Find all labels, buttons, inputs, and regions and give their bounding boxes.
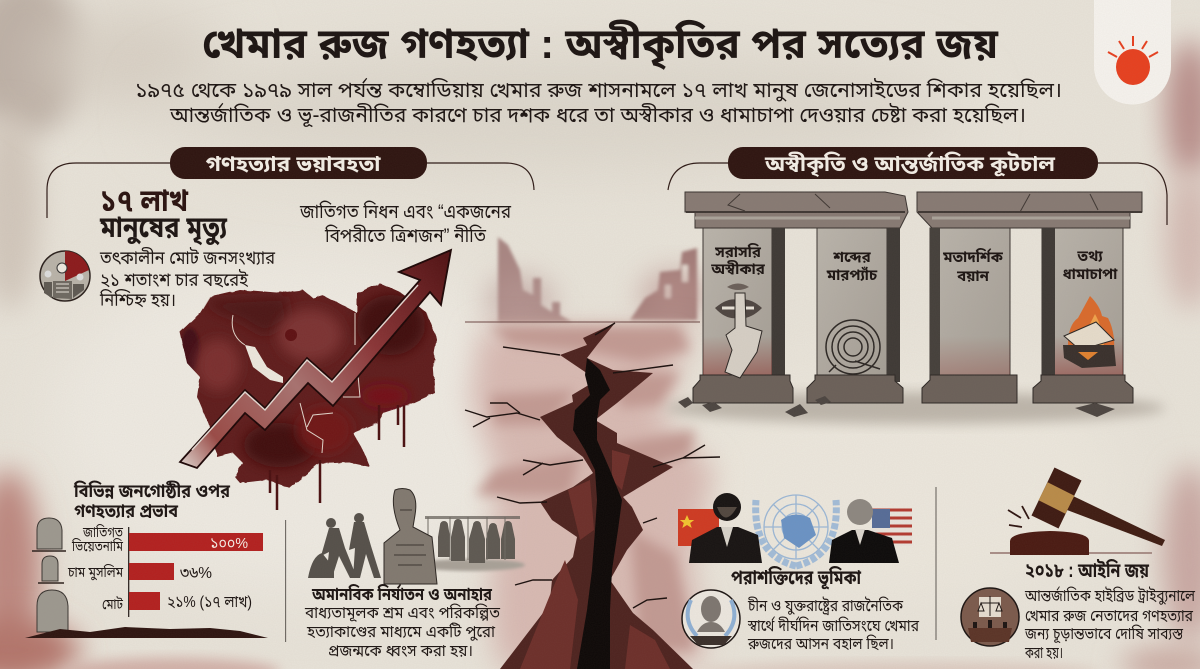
text: 2018 legal victory bbox=[1024, 558, 1195, 662]
bar chart: impact on groups: বিভিন্ন জনগোষ্ঠীর ওপর bbox=[73, 480, 231, 501]
silhouette: Chinese leader bbox=[689, 493, 762, 563]
title: খেমার রুজ গণহত্যা : অস্বীকৃতির পর সত্যের জয় bbox=[202, 19, 999, 71]
panel: left section heading: গণহত্যার ভয়াবহতা bbox=[206, 153, 382, 176]
bar chart: impact on groups: ২১% (১৭ লাখ) bbox=[167, 594, 252, 611]
icon: UN seat bbox=[682, 590, 740, 648]
text: role of superpowers: রুজদের আসন বহাল ছিল। bbox=[747, 634, 894, 653]
text: role of superpowers bbox=[731, 565, 919, 653]
icon: gavel bbox=[990, 474, 1165, 555]
death toll text: নিশ্চিহ্ন হয়। bbox=[99, 290, 176, 310]
bar chart: impact on groups bbox=[25, 480, 268, 638]
pillar: ideological narrative: মতাদর্শিক bbox=[942, 247, 1004, 266]
logo: sun badge bbox=[1094, 0, 1171, 105]
icon: shushing lips and finger bbox=[715, 284, 762, 378]
intro text bbox=[135, 77, 1062, 128]
illustration: superpowers and UN bbox=[678, 493, 912, 566]
panel: right section heading: অস্বীকৃতি ও আন্তর্জাতিক কূটচাল bbox=[764, 152, 1056, 177]
text: role of superpowers: চীন ও যুক্তরাষ্ট্রের রাজনৈতিক bbox=[747, 596, 904, 616]
death toll text: মানুষের মৃত্যু bbox=[99, 212, 228, 246]
rubble bbox=[678, 396, 1115, 417]
intro text: ১৯৭৫ থেকে ১৯৭৯ সাল পর্যন্ত কম্বোডিয়ায় খেমার রুজ শাসনামলে ১৭ লাখ মানুষ জেনোসাইডের শিকার হয়েছিল। bbox=[135, 77, 1062, 102]
bar chart: impact on groups: গণহত্যার প্রভাব bbox=[74, 501, 179, 521]
central fissure with cracked ground and ruins bbox=[465, 237, 720, 669]
pillar: information suppression bbox=[1033, 228, 1133, 403]
bar chart: impact on groups: ৩৬% bbox=[180, 565, 212, 582]
death toll text bbox=[99, 183, 275, 310]
bar chart: impact on groups: জাতিগত bbox=[82, 524, 124, 540]
text: 2018 legal victory: ২০১৮ : আইনি জয় bbox=[1025, 558, 1150, 582]
pillar: direct denial: অস্বীকার bbox=[710, 260, 766, 278]
bar chart: impact on groups: ১০০% bbox=[210, 535, 248, 552]
policy caption: জাতিগত নিধন এবং “একজনের bbox=[299, 200, 512, 223]
black chasm bbox=[573, 358, 622, 669]
pillar: word play: শব্দের bbox=[832, 249, 872, 266]
bar chart: impact on groups: মোট bbox=[102, 596, 123, 612]
pillar: information suppression: তথ্য bbox=[1076, 248, 1103, 265]
text: 2018 legal victory: করা হয়। bbox=[1024, 645, 1063, 662]
pillar: word play bbox=[807, 228, 903, 403]
pillar: information suppression: ধামাচাপা bbox=[1063, 266, 1118, 283]
text: role of superpowers: পরাশক্তিদের ভূমিকা bbox=[731, 565, 861, 590]
fissure walls bbox=[500, 323, 693, 669]
beam left bbox=[685, 192, 908, 228]
panel: four pillars of denial bbox=[665, 192, 1165, 424]
illustration: forced labour and starvation bbox=[308, 488, 525, 584]
icon: skulls badge bbox=[40, 251, 90, 301]
panel: right section heading bbox=[668, 147, 1167, 225]
arrow rising bbox=[180, 250, 451, 468]
silhouette: American leader bbox=[829, 499, 899, 563]
policy caption: বিপরীতে ত্রিশজন” নীতি bbox=[324, 224, 487, 247]
pillar: ideological narrative bbox=[922, 228, 1017, 403]
panel: left section heading bbox=[47, 147, 534, 218]
text: inhuman torture and starvation: বাধ্যতামূলক শ্রম এবং পরিকল্পিত bbox=[304, 603, 501, 622]
beam right bbox=[917, 192, 1142, 228]
intro text: আন্তর্জাতিক ও ভূ-রাজনীতির কারণে চার দশক ধরে তা অস্বীকার ও ধামাচাপা দেওয়ার চেষ্টা করা হয়েছিল। bbox=[169, 102, 1026, 128]
pillar: direct denial bbox=[693, 228, 793, 403]
text: role of superpowers: স্বার্থে দীর্ঘদিন জাতিসংঘে খেমার bbox=[747, 616, 919, 635]
gravestones bbox=[37, 518, 68, 632]
bar chart: impact on groups: ভিয়েতনামি bbox=[71, 538, 123, 554]
text: inhuman torture and starvation: হত্যাকাণ্ডের মাধ্যমে একটি পুরো bbox=[306, 622, 496, 641]
death toll text: ২১ শতাংশ চার বছরেই bbox=[100, 270, 248, 290]
death toll text: ১৭ লাখ bbox=[100, 183, 189, 218]
pillar: ideological narrative: বয়ান bbox=[956, 268, 990, 285]
bar chart: impact on groups: চাম মুসলিম bbox=[67, 564, 123, 581]
policy caption bbox=[299, 200, 512, 247]
pillar: direct denial: সরাসরি bbox=[714, 243, 762, 261]
icon: burning documents bbox=[1063, 296, 1116, 368]
text: inhuman torture and starvation bbox=[304, 584, 501, 660]
icon: maze bbox=[826, 320, 880, 374]
icon: tribunal bbox=[961, 588, 1019, 646]
pillar: word play: মারপ্যাঁচ bbox=[826, 265, 878, 284]
text: inhuman torture and starvation: অমানবিক নির্যাতন ও অনাহার bbox=[311, 584, 493, 604]
death toll text: তৎকালীন মোট জনসংখ্যার bbox=[99, 248, 275, 268]
UN emblem bbox=[756, 495, 836, 566]
map of Cambodia bbox=[180, 283, 437, 510]
branch cracks bbox=[465, 323, 720, 608]
text: inhuman torture and starvation: প্রজন্মকে ধ্বংস করা হয়। bbox=[328, 643, 473, 660]
